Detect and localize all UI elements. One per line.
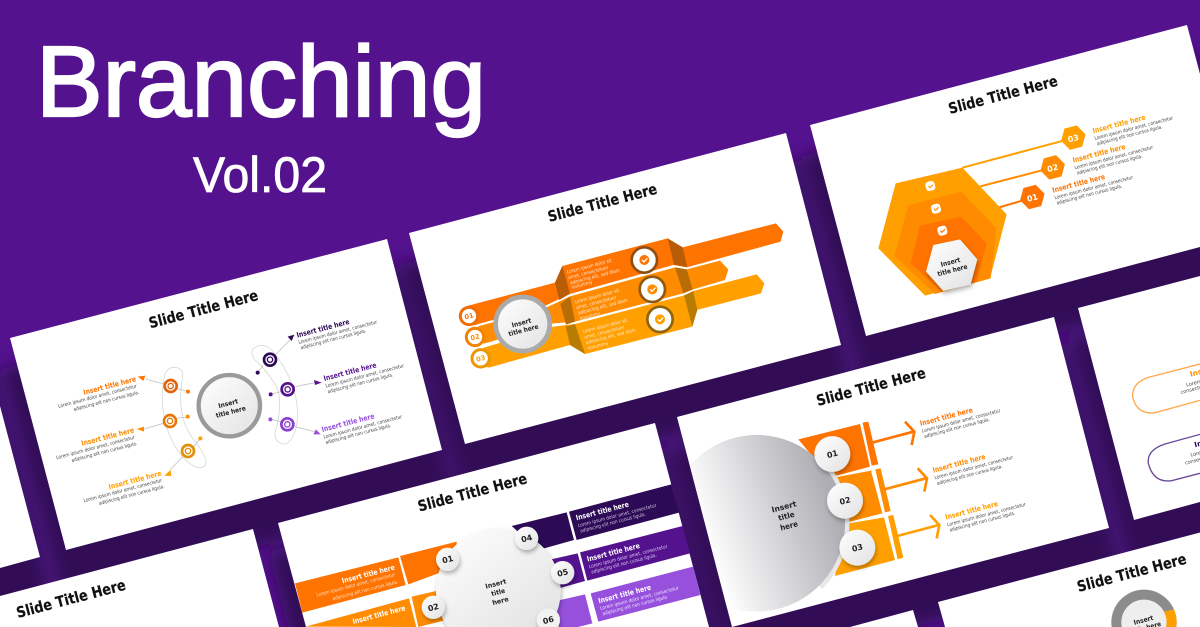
- label: left 2: adipiscing elit non cursus ligula.: [71, 441, 138, 464]
- purple pill: [1148, 434, 1200, 481]
- orange blocks: [798, 424, 895, 576]
- ribbon text 3: nonummy: [587, 341, 609, 352]
- ribbon text 2: nonummy: [579, 311, 601, 322]
- orange pill: [1133, 364, 1200, 413]
- central circle: [436, 528, 561, 627]
- donut chart: [1111, 590, 1177, 627]
- bar label 5: Insert title here: [586, 541, 641, 564]
- ribbon text 1: adipiscing elit, sed diam: [569, 268, 621, 287]
- connector lines: [962, 141, 1063, 210]
- slide title: Slide Title Here: [416, 470, 529, 516]
- bar label 4: adipiscing elit non cursus ligula.: [580, 511, 647, 535]
- ribbon text 1: amet, consectetuer: [568, 265, 610, 281]
- check icons: [925, 180, 948, 236]
- halo arc: [821, 459, 847, 587]
- bar label 1: Lorem ipsum dolor amet, consectetur: [316, 572, 397, 599]
- central circle: title: [490, 587, 506, 598]
- label: right 2: Lorem ipsum dolor amet, consectetur: [325, 363, 406, 390]
- ribbon text 3: [582, 318, 637, 352]
- pill 2 text: [1184, 434, 1200, 467]
- label: left 3: Lorem ipsum dolor amet, consectetur: [83, 478, 164, 504]
- bar label 1: adipiscing elit non cursus ligula.: [332, 579, 399, 602]
- number badges: 02: [470, 332, 481, 342]
- numbers: 01: [826, 449, 839, 460]
- arrows: [872, 422, 939, 538]
- number hexagons: 02: [1046, 163, 1059, 174]
- number hexagons: 03: [1067, 133, 1080, 144]
- label 03: Insert title here: [944, 499, 999, 522]
- label 03: Lorem ipsum dolor amet, consectetur: [1094, 115, 1175, 142]
- central circle: [496, 297, 550, 351]
- panel: slide with six bars around a circle: [278, 423, 709, 627]
- central circle: [199, 375, 260, 436]
- label: left 3: Insert title here: [108, 469, 162, 491]
- numbers: [427, 533, 569, 626]
- label 01: adipiscing elit non cursus ligula.: [924, 417, 991, 440]
- panel: partial slide with pills on right: [1078, 276, 1200, 520]
- slide title: Slide Title Here: [946, 72, 1060, 118]
- donut chart: Insert: [1133, 614, 1155, 627]
- number circles: [422, 527, 574, 627]
- ribbon text 2: adipiscing elit, sed diam: [577, 298, 629, 317]
- slide title: Slide Title Here: [546, 180, 659, 226]
- panel: partial slide bottom left: [0, 529, 279, 627]
- left bars: [295, 542, 457, 627]
- label 01: Lorem ipsum dolor amet, consectetur: [921, 408, 1002, 435]
- vertical sticks: [863, 422, 903, 559]
- central circle: here: [491, 595, 510, 607]
- numbers: 02: [427, 602, 440, 613]
- subheading: Vol.02: Vol.02: [193, 147, 327, 203]
- numbers: 04: [520, 533, 534, 544]
- leader lines: [144, 338, 315, 470]
- left arc outline: [162, 367, 206, 468]
- panel: slide with half circle and arrows: [677, 317, 1109, 627]
- arrowheads: [137, 335, 322, 476]
- ribbon text 1: [566, 258, 621, 291]
- label 03: Insert title here: [1092, 113, 1146, 135]
- heading: Branching: Branching: [36, 26, 486, 138]
- label 03: adipiscing elit non cursus ligula.: [1096, 124, 1164, 147]
- label 02: Lorem ipsum dolor amet, consectetur: [934, 455, 1015, 481]
- numbers: 03: [851, 542, 864, 554]
- central circle: Insert: [484, 577, 508, 591]
- nested hexagons: [878, 168, 1007, 296]
- label 02: Insert title here: [932, 452, 986, 475]
- label 03: Lorem ipsum dolor amet, consectetur: [947, 502, 1027, 528]
- label: right 3: Lorem ipsum dolor amet, consectetur: [323, 414, 404, 441]
- panel: slide with nested hexagons: [810, 25, 1200, 336]
- label: right 1: adipiscing elit non cursus ligula.: [300, 328, 367, 351]
- slide title: Slide Title Here: [814, 364, 928, 410]
- bar label 6: Insert title here: [597, 583, 652, 605]
- label 02: Insert title here: [1072, 142, 1126, 165]
- label: left 2: Insert title here: [80, 425, 135, 448]
- number circles: [814, 436, 875, 566]
- label: left 1: Lorem ipsum dolor amet, consectetur: [58, 383, 138, 410]
- bar label 5: adipiscing elit non cursus ligula.: [591, 552, 658, 576]
- panel: partial slide far left: [0, 406, 40, 568]
- number badges: 03: [475, 354, 487, 364]
- label 01: adipiscing elit non cursus ligula.: [1056, 183, 1123, 207]
- numbers: 01: [441, 554, 454, 565]
- centre hexagon: title here: [937, 263, 969, 278]
- central circle: Insert: [217, 397, 240, 410]
- label 02: Lorem ipsum dolor amet, consectetur: [1074, 145, 1155, 171]
- bar label 2: Insert title here: [352, 603, 406, 626]
- label: right 1: Lorem ipsum dolor amet, consectetur: [298, 319, 379, 346]
- ribbon 3: [478, 274, 764, 367]
- ribbon text 2: Lorem ipsum dolor sit: [574, 288, 620, 306]
- half circle: [690, 435, 845, 612]
- half circle text: here: [779, 519, 799, 533]
- bar label 4: Insert title here: [575, 500, 630, 522]
- central circle: Insert: [511, 316, 533, 329]
- centre hexagon: [926, 239, 977, 291]
- panel: partial slide with donut bottom right: [938, 532, 1200, 627]
- right bars: [512, 484, 700, 627]
- central circle: title here: [215, 404, 247, 420]
- ribbon text 3: adipiscing elit, sed diam: [585, 327, 637, 346]
- ribbon text 3: amet, consectetuer: [584, 324, 626, 341]
- slide title: Slide Title Here: [147, 286, 260, 332]
- check badges: [632, 247, 673, 332]
- connector dots: [186, 371, 273, 440]
- number badges: [460, 307, 489, 367]
- ribbon 2: [475, 261, 728, 343]
- numbers: 02: [839, 495, 852, 507]
- central circle: title here: [508, 323, 540, 338]
- bar label 1: [316, 563, 399, 602]
- panel: slide with folded ribbons: [409, 133, 841, 444]
- right arc outline: [252, 345, 298, 444]
- label 01: Lorem ipsum dolor amet, consectetur: [1054, 175, 1135, 201]
- label: left 3: adipiscing elit non cursus ligula.: [98, 484, 166, 507]
- label 01: Insert title here: [919, 405, 974, 428]
- half circle text: title: [777, 510, 796, 523]
- label: left 2: Lorem ipsum dolor amet, consectetur: [56, 435, 136, 461]
- label 02: adipiscing elit non cursus ligula.: [936, 464, 1004, 487]
- label: right 3: adipiscing elit non cursus ligula.: [325, 423, 392, 446]
- bar label 4: Lorem ipsum dolor amet, consectetur: [577, 503, 658, 529]
- numbers: 06: [542, 614, 555, 626]
- label 01: Insert title here: [1051, 172, 1106, 195]
- half circle text: [771, 499, 799, 533]
- label: right 1: Insert title here: [296, 317, 350, 340]
- number hexagons: [1020, 125, 1086, 209]
- number hexagons: 01: [1026, 192, 1039, 204]
- label: right 2: Insert title here: [323, 360, 377, 383]
- ribbon text 3: Lorem ipsum dolor sit: [582, 318, 628, 335]
- ribbon text 1: Lorem ipsum dolor sit: [566, 258, 612, 276]
- ribbon text 2: [574, 288, 629, 322]
- half circle text: Insert: [771, 499, 798, 514]
- numbers: [826, 449, 864, 554]
- panel: slide with circular branches: [10, 239, 442, 550]
- label: right 2: adipiscing elit non cursus ligula.: [327, 372, 394, 395]
- bar label 1: Insert title here: [341, 563, 396, 585]
- bar label 6: adipiscing elit non cursus ligula.: [602, 594, 669, 617]
- number badges: 01: [464, 311, 475, 321]
- ribbon text 1: nonummy: [571, 280, 593, 291]
- label 03: adipiscing elit non cursus ligula.: [949, 510, 1016, 534]
- label: right 3: Insert title here: [321, 411, 375, 434]
- label: left 1: adipiscing elit non cursus ligula.: [73, 390, 140, 413]
- ribbon 1: [463, 223, 783, 325]
- panel: partial slide bottom centre-right: [850, 610, 918, 627]
- bar label 5: Lorem ipsum dolor amet, consectetur: [588, 544, 669, 570]
- label: left 1: Insert title here: [82, 374, 137, 397]
- ribbon text 2: amet, consectetuer: [576, 295, 618, 311]
- bar label 6: Lorem ipsum dolor amet, consectetur: [600, 585, 680, 612]
- numbers: 05: [556, 567, 569, 579]
- slide title: Slide Title Here: [14, 576, 128, 622]
- pill 1 text: [1180, 364, 1200, 396]
- centre hexagon: Insert: [940, 256, 962, 269]
- label 02: adipiscing elit non cursus ligula.: [1076, 153, 1144, 177]
- target icons: [164, 354, 294, 457]
